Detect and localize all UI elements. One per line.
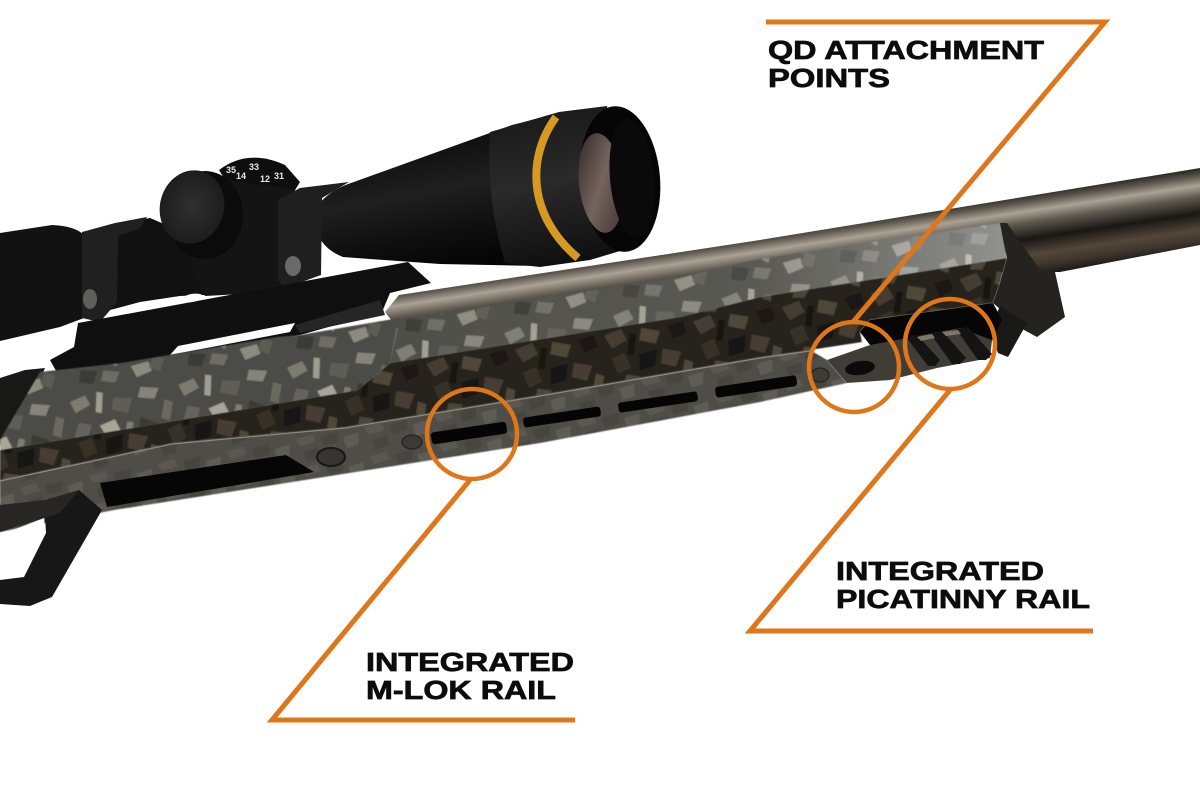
label: picatinny: INTEGRATED (836, 556, 1044, 586)
scope (0, 103, 666, 341)
dial numbers: 33 (249, 162, 259, 172)
highlight circle: m-lok (427, 389, 517, 479)
top strip sheen (390, 223, 1007, 363)
bolt (295, 300, 385, 333)
erector tube (110, 218, 205, 310)
side cap (152, 163, 232, 251)
leader line: QD (766, 22, 1105, 322)
ejection port opening (170, 323, 295, 355)
label: QD: POINTS (768, 63, 890, 93)
picatinny tops (917, 330, 961, 341)
highlight circle: picatinny (905, 299, 995, 389)
dial numbers: 12 (260, 174, 270, 184)
front ring (278, 182, 349, 288)
stock dark carbon side (0, 258, 1007, 480)
stock lower rail strip (0, 350, 847, 532)
main tube (318, 118, 540, 266)
QD plate screw (811, 368, 829, 382)
trigger guard (0, 490, 102, 606)
magazine well cutout (100, 455, 314, 507)
leader line: picatinny (750, 390, 1093, 631)
picatinny plate (827, 328, 992, 383)
m-lok slots (431, 375, 797, 445)
leader line: m-lok (272, 480, 575, 720)
lens (574, 131, 628, 235)
gold band (536, 117, 578, 258)
left receiver end (0, 368, 45, 445)
callout: picatinny rail (750, 299, 1093, 631)
front ring screw (285, 256, 301, 276)
dial numbers: 31 (274, 171, 284, 181)
stock action section with flakes (0, 318, 399, 450)
rear tab (990, 306, 1027, 357)
magazine well screw (317, 448, 345, 466)
rear ring (82, 217, 147, 322)
label: QD: QD ATTACHMENT (768, 35, 1044, 65)
picatinny teeth (906, 327, 992, 366)
stock top strip with flakes (390, 223, 1007, 363)
highlight circle: QD (809, 322, 899, 412)
trigger guard opening (0, 518, 45, 579)
callout: QD attachment points (766, 22, 1105, 412)
rib highlight (0, 351, 810, 481)
stock panels (0, 223, 1007, 532)
turret body (190, 180, 300, 296)
objective bell (489, 106, 630, 267)
rifle illustration (0, 103, 1200, 606)
m-lok plate screw (402, 435, 422, 449)
rear ring screw (83, 289, 97, 309)
upper trigger guard band (0, 490, 79, 532)
turret dial (219, 158, 300, 195)
label: m-lok: INTEGRATED (366, 647, 574, 677)
scope mount rail and receiver (50, 262, 431, 378)
callout: m-lok rail (272, 389, 575, 720)
label: m-lok: M-LOK RAIL (366, 675, 556, 705)
objective rim (574, 103, 666, 255)
dial numbers: 35 (226, 165, 236, 175)
ocular section (0, 225, 84, 341)
side cap housing (167, 171, 243, 259)
dial numbers: 14 (236, 171, 246, 181)
label: picatinny: PICATINNY RAIL (836, 584, 1090, 614)
inner baffles (605, 116, 659, 240)
dial numbers (226, 162, 284, 184)
rail channel shadow (860, 303, 1002, 345)
barrel (385, 168, 1200, 330)
forend end block (993, 223, 1065, 337)
QD socket (844, 359, 876, 377)
mount hole (180, 292, 204, 304)
